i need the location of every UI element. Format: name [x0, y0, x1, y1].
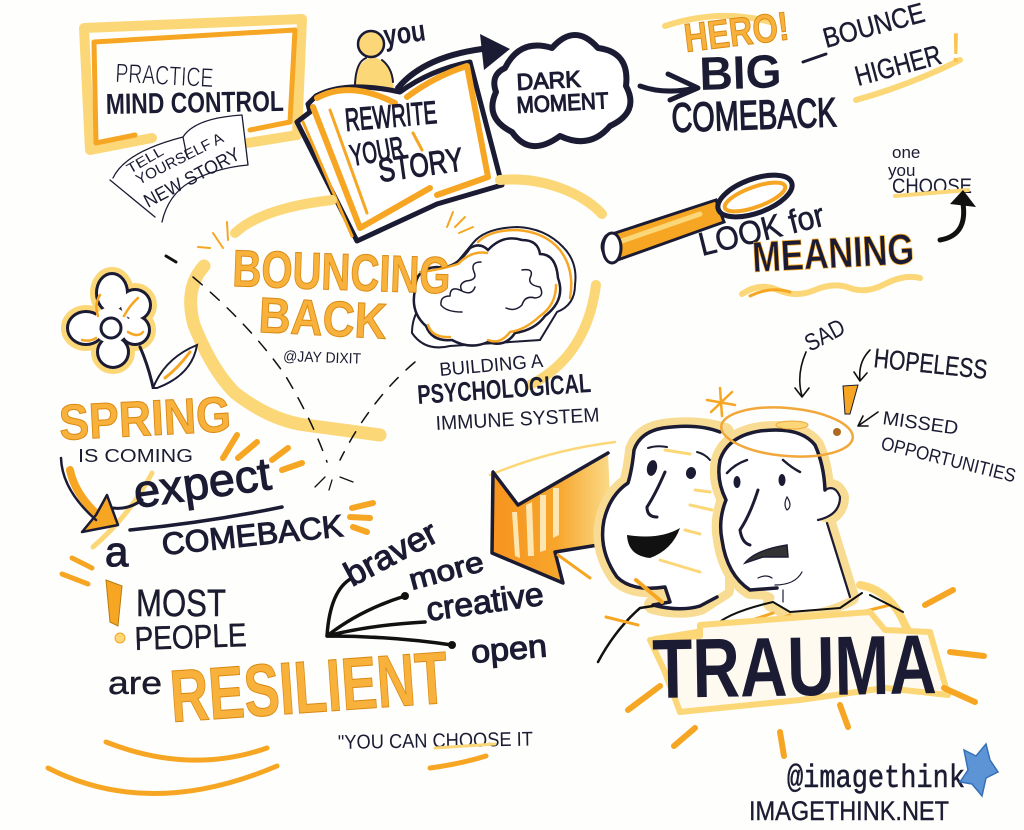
- text: one you choose: [888, 143, 976, 240]
- label: hopeless: [854, 343, 989, 385]
- text: building a psychological immune system: IMMUNE SYSTEM: [435, 404, 600, 435]
- arrow: you to dark moment: [398, 34, 510, 88]
- chart: branching words: [327, 514, 548, 670]
- label: hopeless: HOPELESS: [872, 343, 989, 385]
- text: one you choose: CHOOSE: [892, 175, 972, 198]
- panel: practice mind control: PRACTICE: [115, 58, 214, 93]
- heading: hero big comeback: COMEBACK: [671, 89, 837, 141]
- label: sad: [795, 314, 850, 397]
- icon: open book tell yourself a new story: NEW STORY: [140, 144, 244, 212]
- text: most people are resilient: are: [108, 665, 162, 701]
- text: expect a comeback: expect: [130, 447, 274, 518]
- heading: hero big comeback: BIG: [698, 44, 782, 100]
- panel: rewrite your story book: [297, 62, 502, 241]
- label: missed opportunities: [858, 408, 1018, 487]
- text: expect a comeback: COMEBACK: [160, 508, 345, 562]
- attribution: imagethink: [749, 744, 998, 826]
- text: building a psychological immune system: [416, 351, 600, 435]
- arrow: trauma to growth: [490, 442, 615, 583]
- text: most people are resilient: RESILIENT: [167, 636, 450, 738]
- chart: branching words: open: [469, 627, 548, 670]
- chart: branching words: more: [406, 546, 487, 597]
- heading: bouncing back: BACK: [257, 287, 388, 350]
- text: bounce higher: HIGHER: [852, 39, 945, 92]
- icon: open book tell yourself a new story: [110, 115, 248, 222]
- text: bounce higher: !: [950, 24, 962, 71]
- attribution: imagethink: @imagethink: [787, 760, 965, 797]
- text: you can choose it: "YOU CAN CHOOSE IT: [338, 729, 533, 754]
- text: most people are resilient: PEOPLE: [134, 616, 247, 657]
- label: missed opportunities: MISSED: [881, 408, 959, 440]
- character: sad head with halo: [655, 388, 922, 655]
- icon: flower: [69, 275, 197, 388]
- text: bounce higher: [803, 0, 962, 100]
- text: you can choose it: [338, 729, 533, 768]
- character: smiling head: [598, 426, 725, 662]
- panel: rewrite your story book: YOUR: [347, 131, 406, 173]
- text: most people are resilient: MOST: [136, 583, 226, 625]
- text: look for meaning: LOOK for: [695, 196, 828, 263]
- text: one you choose: you: [888, 161, 915, 180]
- heading: hero big comeback: HERO!: [682, 4, 791, 61]
- icon: person labelled you: [355, 14, 428, 90]
- chart: branching words: braver: [338, 514, 444, 594]
- cloud: dark moment: DARK: [516, 66, 582, 95]
- heading: bouncing back: BOUNCING: [232, 240, 451, 306]
- cloud: dark moment: MOMENT: [516, 87, 609, 118]
- heading: bouncing back: [198, 222, 451, 368]
- cloud: dark moment: [492, 35, 630, 146]
- text: building a psychological immune system: PSYCHOLOGICAL: [416, 368, 592, 410]
- heading: spring is coming: IS COMING: [78, 446, 193, 466]
- icon: magnifying glass: [602, 167, 797, 263]
- panel: practice mind control: MIND CONTROL: [106, 86, 284, 121]
- icon: open book tell yourself a new story: YOURSELF A: [133, 130, 226, 189]
- label: sad: SAD: [800, 314, 850, 357]
- text: expect a comeback: [62, 447, 373, 584]
- attribution: imagethink: IMAGETHINK.NET: [749, 796, 949, 826]
- panel: practice mind control: [84, 19, 302, 150]
- heading: spring is coming: SPRING: [58, 386, 232, 451]
- text: look for meaning: MEANING: [751, 226, 915, 282]
- heading: hero big comeback: [665, 4, 837, 141]
- arrow: dark moment to comeback: [640, 74, 698, 100]
- icon: open book tell yourself a new story: TELL: [124, 143, 166, 177]
- icon: brain: [412, 212, 576, 347]
- text: building a psychological immune system: BUILDING A: [439, 351, 544, 381]
- decorative swooshes: [48, 742, 277, 794]
- heading: trauma: TRAUMA: [652, 617, 937, 716]
- panel: rewrite your story book: REWRITE: [343, 94, 438, 138]
- heading: trauma: [628, 590, 984, 756]
- chart: branching words: creative: [424, 575, 546, 628]
- panel: rewrite your story book: STORY: [376, 140, 465, 189]
- heading: spring is coming: [58, 386, 302, 470]
- arrow: spring to expect: [61, 458, 152, 547]
- heading: bouncing back: @JAY DIXIT: [283, 348, 361, 368]
- text: one you choose: one: [892, 143, 920, 162]
- dashed trajectories: [166, 256, 415, 490]
- icon: person labelled you: you: [381, 14, 428, 53]
- text: expect a comeback: a: [105, 528, 129, 575]
- decorative ring: bouncing back oval: [191, 179, 602, 435]
- text: most people are resilient: [106, 580, 450, 738]
- icon: exclamation mark: [843, 385, 858, 414]
- text: look for meaning: [695, 196, 920, 296]
